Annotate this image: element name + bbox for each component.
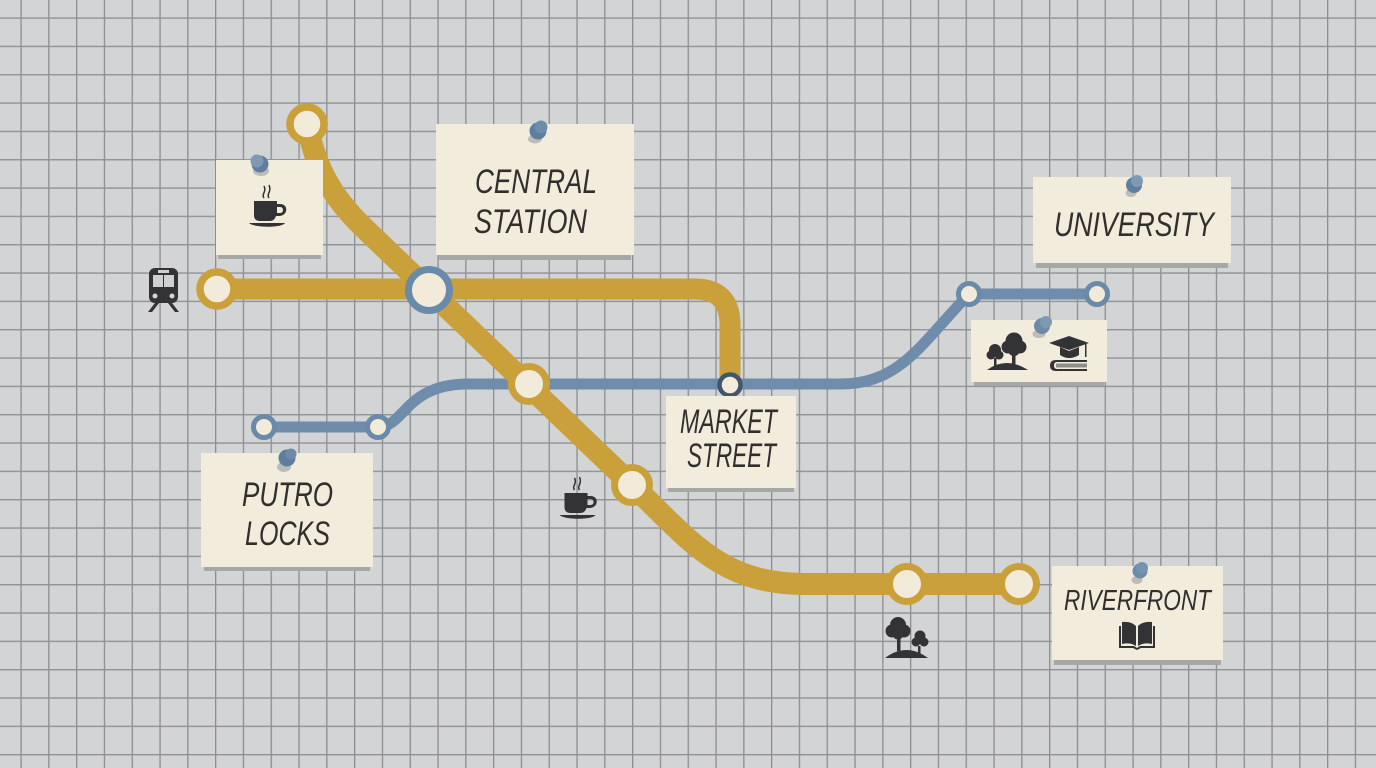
pin (1132, 562, 1148, 584)
note: market street (666, 396, 796, 492)
note: putro locks (201, 448, 373, 571)
station name: LOCKS (245, 515, 330, 553)
note: coffee (216, 154, 323, 259)
gold transit line: diagonal (307, 124, 1019, 584)
icon: graduation cap on book (1049, 336, 1089, 371)
station: interchange (512, 366, 546, 402)
icon: trees (986, 332, 1028, 370)
station name: UNIVERSITY (1054, 206, 1216, 244)
station name (474, 163, 597, 241)
station: riverfront terminus (1002, 566, 1036, 602)
icon: coffee cup (249, 185, 286, 227)
station name (242, 476, 333, 553)
station: blue west terminus (254, 416, 274, 438)
station name (680, 403, 779, 475)
station: diagonal stop (614, 468, 650, 502)
station name: STREET (687, 437, 777, 475)
pin (277, 448, 296, 472)
station name: MARKET (680, 403, 779, 441)
icon: train (148, 268, 179, 312)
station markers (200, 107, 1108, 602)
note: park and campus icons (971, 316, 1107, 386)
pin (528, 120, 548, 144)
note: riverfront (1052, 562, 1223, 665)
gold transit line: branch (217, 289, 730, 385)
station name: CENTRAL (475, 163, 597, 201)
note: university (1033, 175, 1231, 268)
icon: open book (1119, 622, 1155, 650)
station name: RIVERFRONT (1064, 585, 1213, 617)
station: blue west stop (368, 416, 388, 438)
icon: coffee cup near line (560, 477, 597, 519)
station: north terminus (290, 107, 324, 141)
blue transit line (264, 294, 1097, 427)
icon: trees near riverfront (885, 617, 928, 658)
station: west terminus (200, 272, 234, 306)
station name: STATION (474, 203, 587, 241)
note: central station (436, 120, 634, 260)
station: blue east terminus (1086, 284, 1108, 304)
pin (1032, 316, 1052, 338)
pin (250, 154, 269, 176)
station name: PUTRO (242, 476, 333, 514)
pin (1126, 175, 1143, 197)
station: central hub (408, 270, 450, 310)
station: market street (720, 374, 740, 396)
station: blue east stop (958, 284, 980, 304)
station: riverfront stop (890, 566, 924, 602)
